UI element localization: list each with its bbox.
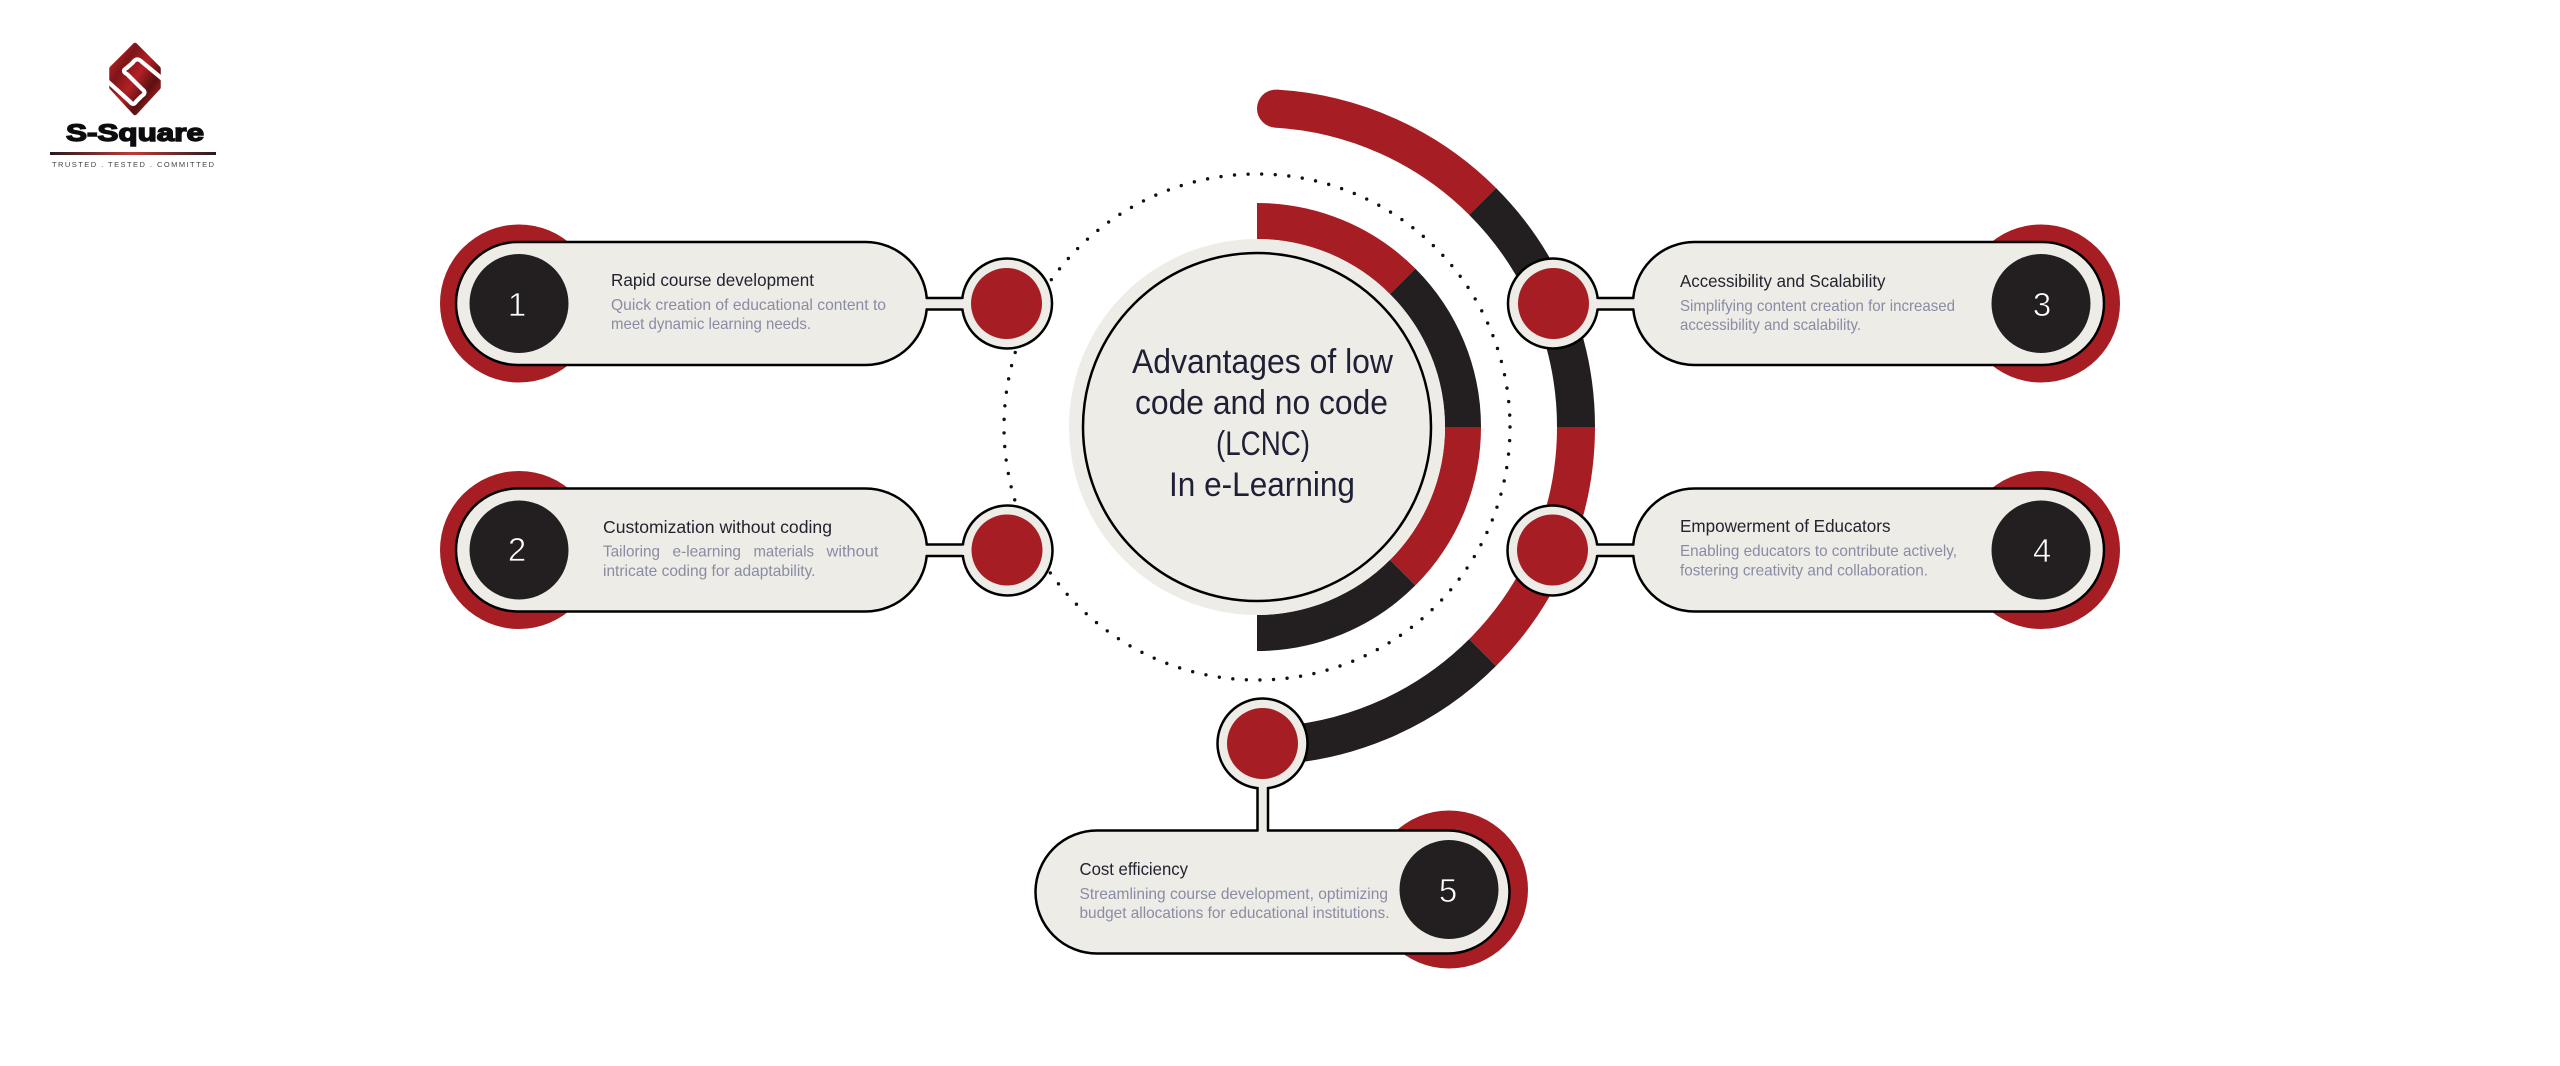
number badge 4 xyxy=(1992,500,2090,600)
logo rule xyxy=(50,152,216,155)
panel 4: Empowerment of Educators xyxy=(1633,471,2120,629)
number badge 4: 4 xyxy=(2033,532,2051,569)
description 2: materials xyxy=(754,544,814,560)
number badge 5: 5 xyxy=(1439,872,1457,909)
heading 4: Empowerment of Educators xyxy=(1680,516,1891,536)
description 2: without xyxy=(825,544,879,560)
logo tagline: TRUSTED . TESTED . COMMITTED xyxy=(52,160,215,169)
node 3 with connector xyxy=(1508,258,1636,348)
heading 2: Customization without coding xyxy=(603,517,832,537)
title: Advantages of low xyxy=(1132,343,1393,381)
title: In e-Learning xyxy=(1169,466,1355,504)
number badge 3 xyxy=(1992,254,2090,353)
description 1: meet dynamic learning needs. xyxy=(611,316,811,333)
panel 3: Accessibility and Scalability xyxy=(1633,224,2120,382)
description 2 xyxy=(603,544,879,580)
number badge 1 xyxy=(470,254,568,353)
number badge 2 xyxy=(470,500,568,600)
node 1 with connector xyxy=(924,258,1052,348)
heading 3: Accessibility and Scalability xyxy=(1680,271,1886,291)
panel 1: Rapid course development xyxy=(440,224,927,382)
description 4: fostering creativity and collaboration. xyxy=(1680,562,1928,580)
description 2: Tailoring xyxy=(603,544,660,560)
panel 5: Cost efficiency xyxy=(1036,810,1528,968)
inner segmented arc xyxy=(1257,221,1463,633)
description 4: Enabling educators to contribute actively, xyxy=(1680,543,1957,560)
description 1: Quick creation of educational content to xyxy=(611,297,886,314)
node 2 with connector xyxy=(924,506,1052,596)
description 2: intricate coding for adaptability. xyxy=(603,563,816,580)
description 1 xyxy=(611,297,886,333)
description 5 xyxy=(1080,886,1390,922)
heading 1: Rapid course development xyxy=(611,270,814,290)
title: (LCNC) xyxy=(1216,425,1310,463)
description 4 xyxy=(1680,543,1957,580)
number badge 2: 2 xyxy=(508,531,526,568)
number badge 3: 3 xyxy=(2033,286,2051,323)
number badge 1: 1 xyxy=(508,286,526,323)
heading 5: Cost efficiency xyxy=(1080,859,1188,879)
description 2: e-learning xyxy=(672,544,741,560)
node 5 with connector xyxy=(1218,698,1308,833)
logo: S-Square xyxy=(50,45,216,169)
description 3: accessibility and scalability. xyxy=(1680,317,1861,334)
central circle with title xyxy=(1069,239,1445,615)
outer segmented arc xyxy=(1257,90,1576,746)
number badge 5 xyxy=(1400,840,1498,939)
description 5: budget allocations for educational institutions. xyxy=(1080,905,1390,922)
panel 2: Customization without coding xyxy=(440,471,927,629)
description 3 xyxy=(1680,298,1955,334)
description 5: Streamlining course development, optimizing xyxy=(1080,886,1388,903)
logo wordmark: S-Square xyxy=(66,120,204,147)
title: code and no code xyxy=(1135,384,1388,422)
icon: S diamond xyxy=(105,45,165,113)
description 3: Simplifying content creation for increased xyxy=(1680,298,1955,315)
title xyxy=(1132,343,1393,504)
node 4 with connector xyxy=(1508,506,1636,596)
dotted orbit ring xyxy=(1004,174,1510,680)
